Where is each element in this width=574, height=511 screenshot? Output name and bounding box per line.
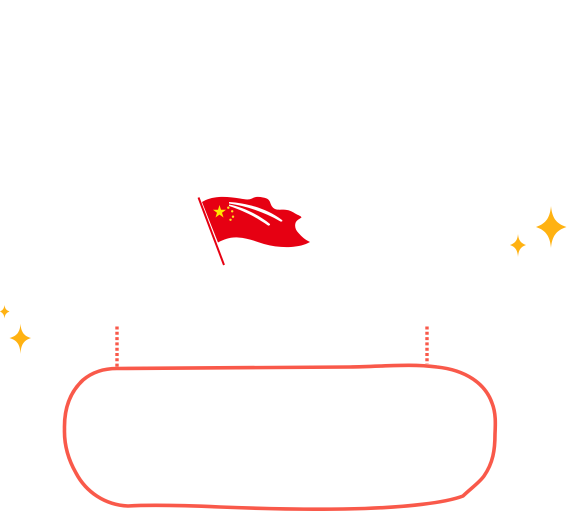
hand-drawn rounded frame <box>64 365 495 509</box>
icon: small sparkle top right <box>510 234 526 257</box>
icon: large sparkle top right <box>536 206 566 248</box>
icon: red flag <box>198 197 310 265</box>
dotted connector left <box>115 326 119 368</box>
dotted connector right <box>425 326 429 364</box>
icon: tiny sparkle left <box>0 305 10 318</box>
icon: large yellow star <box>213 205 226 218</box>
icon: large sparkle left <box>10 324 31 354</box>
icon: small yellow stars <box>227 206 234 221</box>
flag white streaks <box>229 202 282 226</box>
